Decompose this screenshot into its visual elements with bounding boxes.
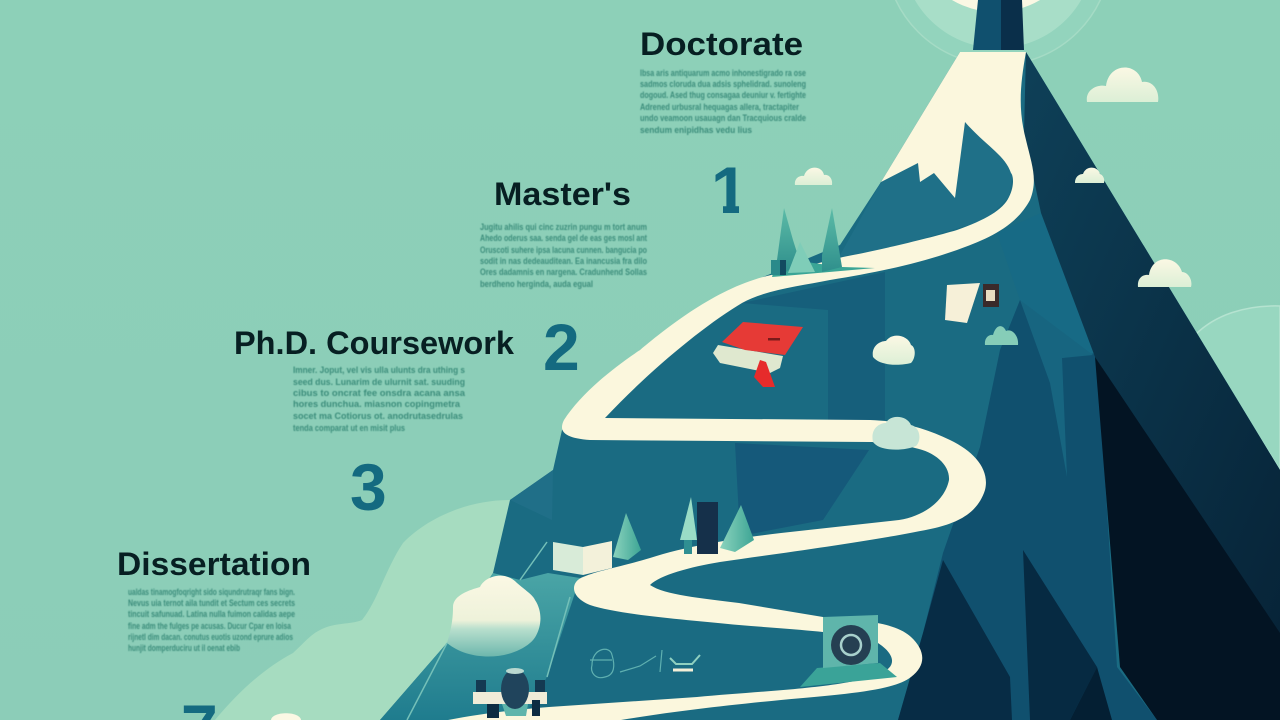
heading: Dissertation: Dissertation: [117, 546, 311, 582]
text block: Master's: Ahedo oderus saa. senda gel de eas ges mosl ant: [480, 233, 647, 243]
cloud: right slope: [1138, 259, 1191, 287]
trees: middle grove: [613, 497, 754, 560]
lit slope with pale ridges: [380, 573, 580, 720]
cloud: near numeral one: [795, 168, 832, 185]
lower dark facet right: [1023, 550, 1097, 720]
icon: graduation cap on book: [713, 322, 803, 387]
text block: Ph.D. Coursework: socet ma Cotiorus ot. anodrutasedrulas: [293, 411, 463, 421]
tassel: [754, 360, 775, 387]
pale hill right: [1195, 306, 1280, 470]
text block: Ph.D. Coursework: cibus to oncrat fee onsdra acana ansa: [293, 388, 465, 398]
text block: Dissertation: fine adm the fulges pe acusas. Ducur Cpar en loisa: [128, 621, 291, 631]
numeral 1: 1: [711, 153, 748, 227]
text block: Ph.D. Coursework: [293, 365, 465, 433]
cloud: on ridge: [1075, 168, 1104, 183]
text block: Ph.D. Coursework: hores dunchua. miasnon copingmetra: [293, 399, 460, 409]
heading: Master's: Master's: [494, 176, 631, 212]
icon: scroll and sign: [945, 283, 999, 323]
mountain: [380, 52, 1280, 720]
text block: Master's: berdheno herginda, auda egual: [480, 279, 593, 289]
teal flank under the upper road: [997, 213, 1097, 362]
mid blue flank: [898, 300, 1157, 720]
darkest shadow: [1095, 357, 1280, 720]
cloud: small mint: [985, 326, 1018, 345]
icon: sketch scribbles: [590, 649, 700, 678]
text block: Doctorate: undo veamoon usauagn dan Tracquious cralde: [640, 113, 806, 123]
cloud: over road: [872, 417, 919, 450]
dark strip below upper road: [742, 272, 885, 420]
mountain base: [380, 52, 1280, 720]
sun behind the summit: [885, 0, 1111, 65]
icon: open book: [553, 541, 612, 575]
text block: Dissertation: Nevus uia ternot aila tundit et Sectum ces secrets: [128, 598, 295, 608]
summit tower: [973, 0, 1024, 50]
red cap board: [722, 322, 803, 355]
text block: Doctorate: Ibsa aris antiquarum acmo inhonestigrado ra ose: [640, 68, 806, 78]
icon: traveller figure: [473, 668, 547, 718]
text block: Master's: [480, 222, 648, 289]
text block: Master's: Jugitu ahilis qui cinc zuzrin pungu m tort anum: [480, 222, 647, 232]
icon: target box: [800, 615, 897, 687]
text block: Ph.D. Coursework: Imner. Joput, vel vis ulla ulunts dra uthing s: [293, 365, 465, 375]
upper teal ridge: [839, 122, 1013, 257]
text block: Doctorate: dogoud. Ased thug consagaa deuniur v. fertighte: [640, 90, 806, 100]
text block: Master's: Ores dadamnis en nargena. Cradunhend Sollas: [480, 267, 647, 277]
text block: Ph.D. Coursework: seed dus. Lunarim de ulurnit sat. suuding: [293, 377, 465, 387]
cloud: bottom edge: [271, 713, 301, 720]
text block: Dissertation: tincuit safunuad. Latina nulla fuimon calidas aepe: [128, 609, 295, 619]
cloud: mid mountain: [873, 336, 915, 365]
text block: Doctorate: sendum enipidhas vedu lius: [640, 125, 752, 135]
text block: Ph.D. Coursework: tenda comparat ut en misit plus: [293, 423, 405, 433]
icon: dark door: [697, 502, 718, 554]
text block: Doctorate: [640, 68, 806, 135]
winding road and snow cap: [448, 52, 1034, 720]
heading: Ph.D. Coursework: Ph.D. Coursework: [234, 325, 514, 361]
pale hills lower left: [215, 500, 560, 720]
upper left slope facet: [510, 470, 553, 520]
text block: Doctorate: Adrened urbusral hequagas allera, tractapiter: [640, 102, 799, 112]
text block: Dissertation: rijnetl dim dacan. conutus euotis uzond eprure adios: [128, 632, 293, 642]
numeral 3: 3: [350, 450, 387, 524]
lower dark facet left: [898, 560, 1012, 720]
cloud: top right: [1087, 67, 1158, 102]
trees: upper grove: [771, 208, 875, 277]
heading: Doctorate: Doctorate: [640, 26, 803, 62]
text block: Doctorate: sadmos cloruda dua adsis sphelidrad. sunoleng: [640, 79, 806, 89]
cloud: large lower left: [447, 576, 540, 657]
text block: Master's: sodit in nas dedeauditean. Ea inancusia fra dilo: [480, 256, 648, 266]
text block: Dissertation: hunjit domperduciru ut il oenat ebib: [128, 643, 240, 653]
text block: Dissertation: [128, 587, 295, 653]
text block: Master's: Oruscoti suhere ipsa lacuna cunnen. bangucia po: [480, 245, 647, 255]
text block: Dissertation: ualdas tinamogfoqright sido siqundrutraqr fans bign.: [128, 587, 295, 597]
book pages: [713, 345, 783, 373]
numeral 2: 2: [543, 310, 580, 384]
lighter streak on flank: [1020, 300, 1093, 477]
dark facet inside road bend: [735, 443, 869, 536]
dark right face: [1024, 52, 1280, 640]
